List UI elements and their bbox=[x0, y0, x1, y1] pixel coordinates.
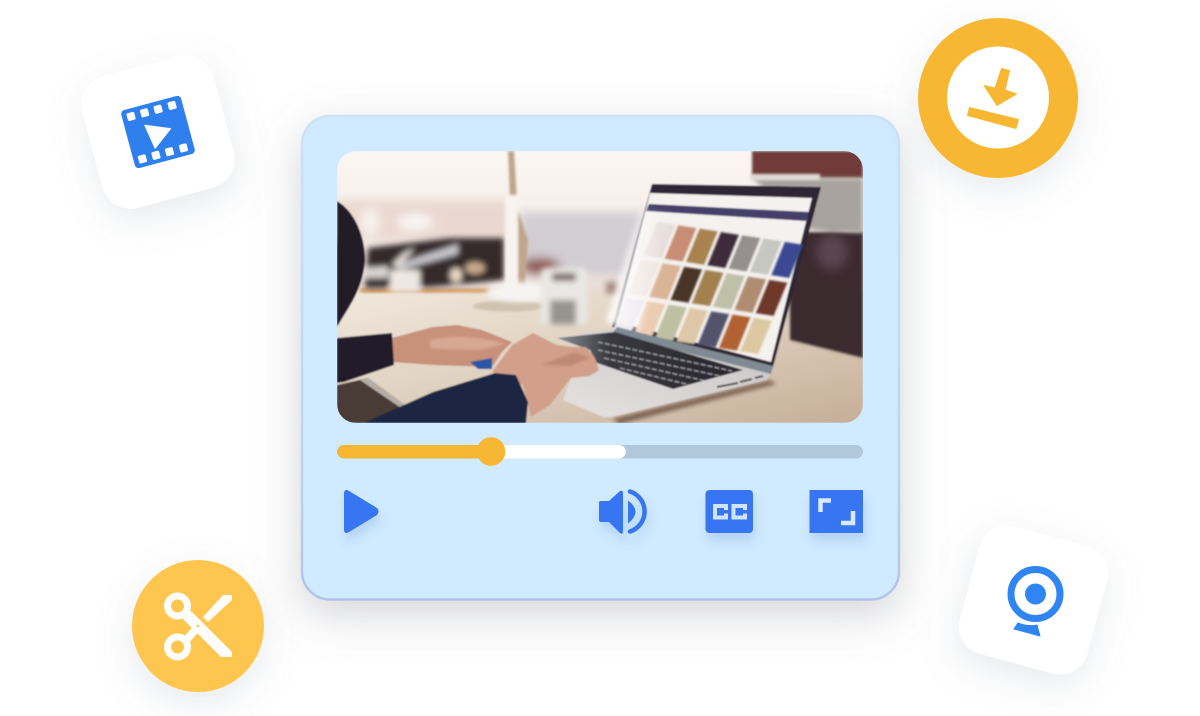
icon: download arrow bbox=[968, 68, 1018, 128]
lamp and glass bbox=[505, 151, 528, 295]
progress knob bbox=[477, 437, 505, 466]
icon: scissors bbox=[168, 595, 232, 657]
badge: scissors bbox=[132, 560, 264, 692]
progress bar bbox=[337, 437, 863, 466]
blurred objects behind bbox=[365, 238, 504, 292]
icon: volume bbox=[599, 491, 645, 534]
hands and sleeves bbox=[392, 325, 512, 367]
icon: fullscreen bbox=[810, 490, 863, 533]
icon: film strip bbox=[120, 95, 196, 169]
photo: person using a laptop bbox=[337, 151, 863, 424]
screen glare bbox=[604, 208, 662, 332]
table edge bbox=[337, 378, 400, 423]
tile: film video icon bbox=[75, 49, 241, 215]
laptop shadow bbox=[612, 380, 776, 424]
desk bbox=[337, 290, 863, 423]
photo grid on screen bbox=[612, 222, 803, 354]
icon: webcam bbox=[1011, 570, 1060, 636]
right wall panels bbox=[790, 232, 863, 358]
torso bbox=[337, 201, 365, 327]
icon: closed captions bbox=[706, 490, 753, 533]
laptop screen bbox=[612, 184, 821, 367]
tile: webcam bbox=[953, 519, 1114, 681]
icon: play button bbox=[344, 490, 378, 533]
laptop base and keyboard bbox=[557, 329, 773, 417]
panel: video player card bbox=[302, 116, 899, 600]
badge: download bbox=[918, 18, 1078, 178]
